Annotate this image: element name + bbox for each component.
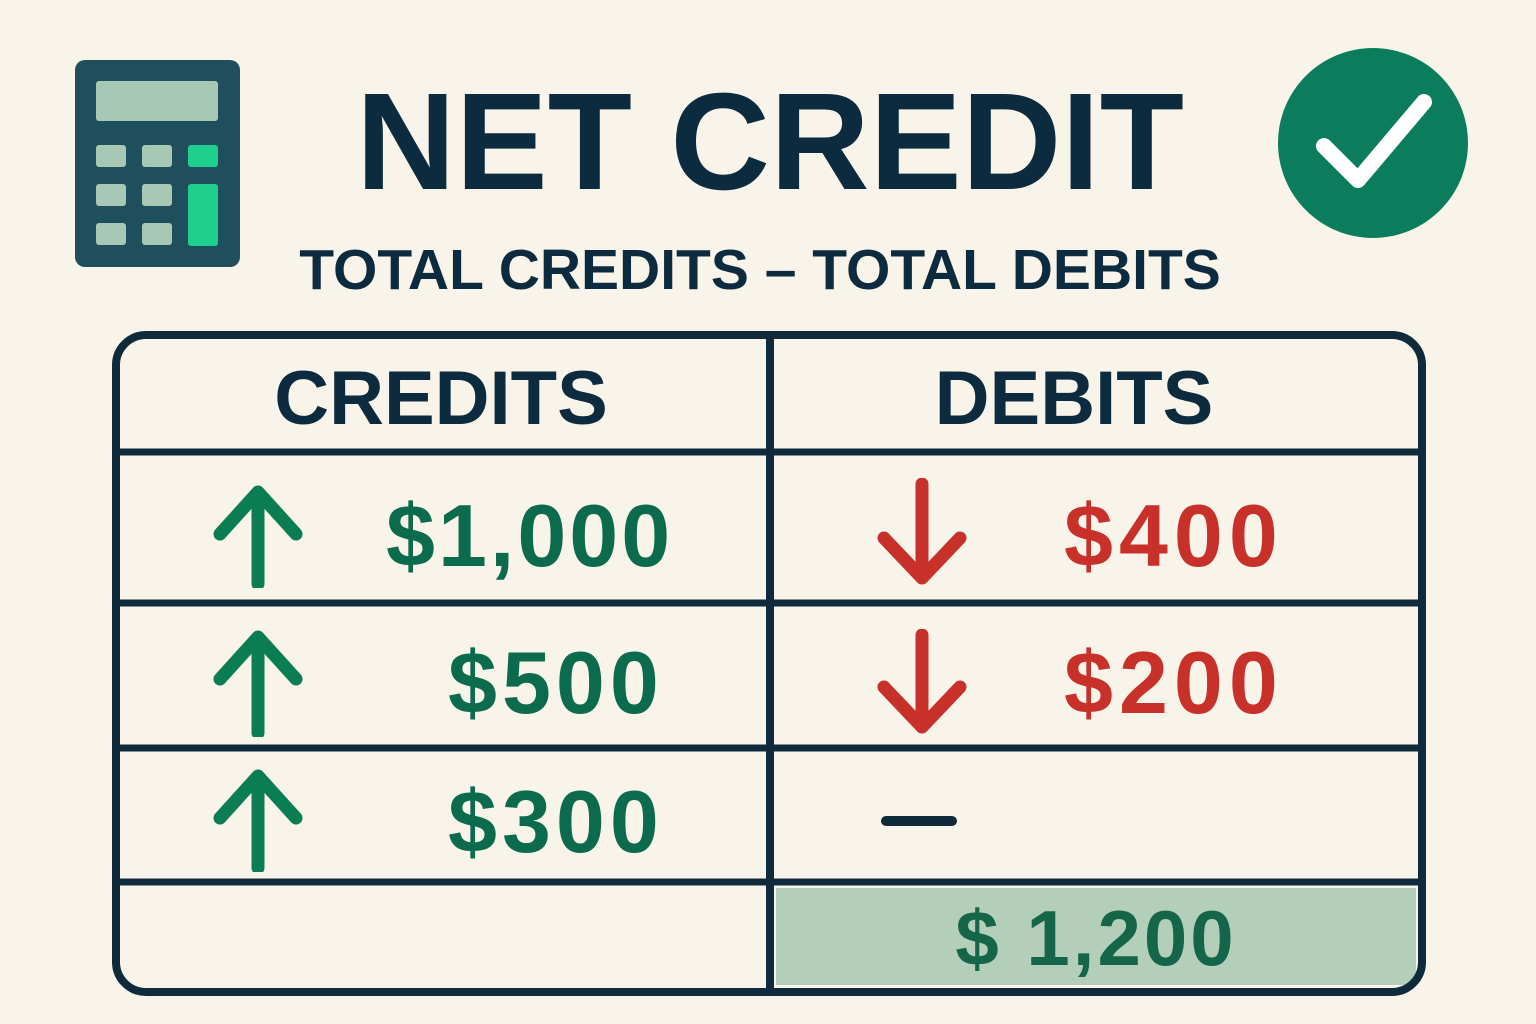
- debit row 1: $400: [1064, 486, 1284, 585]
- icon: up arrow: [214, 770, 302, 872]
- credit row 2: [214, 630, 664, 737]
- debit row 3: dash: [881, 816, 957, 826]
- icon: up arrow: [214, 486, 302, 588]
- icon: down arrow: [878, 629, 966, 734]
- header: credits: CREDITS: [274, 356, 608, 441]
- total value: $ 1,200: [955, 894, 1237, 982]
- subtitle: formula: TOTAL CREDITS – TOTAL DEBITS: [299, 238, 1221, 302]
- icon: up arrow: [214, 630, 302, 737]
- debit row 2: [878, 629, 1284, 734]
- credit row 1: [214, 486, 673, 588]
- icon: calculator: [75, 60, 240, 267]
- icon: down arrow: [878, 478, 966, 584]
- credit row 3: $300: [448, 772, 664, 871]
- header: debits: DEBITS: [935, 356, 1213, 441]
- icon: check circle: [1278, 48, 1468, 238]
- debit row 1: [878, 478, 1284, 585]
- credit row 2: $500: [448, 633, 664, 732]
- total cell highlight: [776, 888, 1416, 985]
- title: NET CREDIT: [356, 65, 1184, 219]
- debit row 2: $200: [1064, 633, 1284, 732]
- table: [112, 331, 1426, 996]
- credit row 3: [214, 770, 664, 872]
- credit row 1: $1,000: [386, 486, 673, 585]
